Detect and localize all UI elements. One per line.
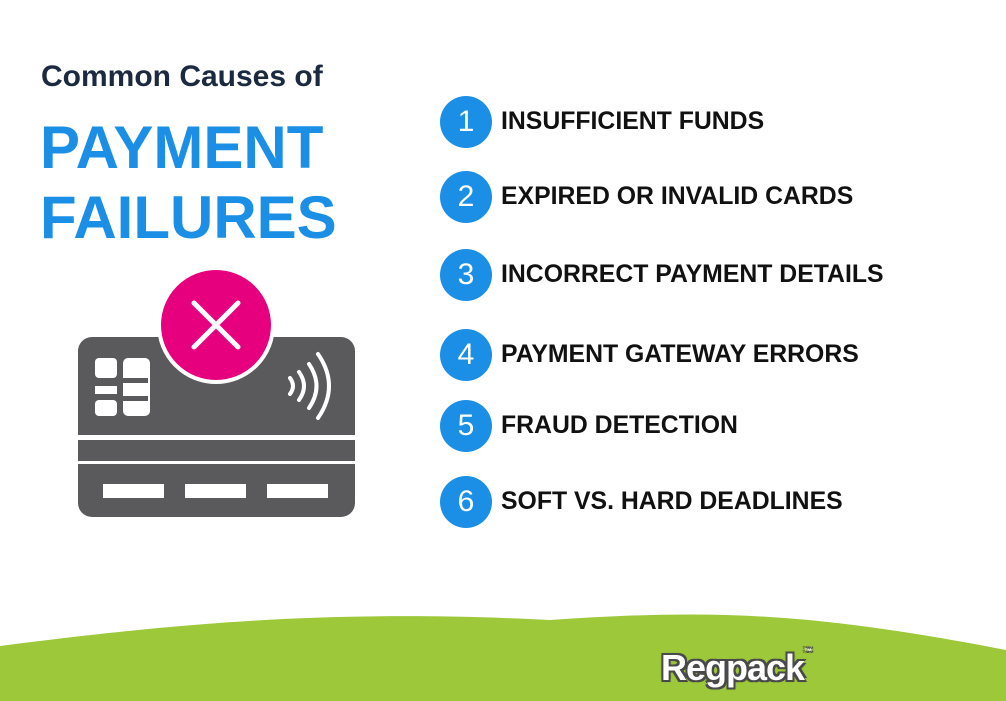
icon: declined credit card [78, 270, 355, 517]
title: payment failures: PAYMENT [40, 114, 323, 181]
item 3 [440, 249, 884, 301]
footer green wave [0, 614, 1006, 701]
item 6: SOFT VS. HARD DEADLINES [501, 488, 843, 515]
item 4: PAYMENT GATEWAY ERRORS [501, 341, 859, 368]
item 1: INSUFFICIENT FUNDS [501, 108, 764, 135]
item 4 [440, 329, 859, 381]
item 4: 4 [458, 338, 474, 371]
item 6 [440, 476, 843, 528]
item 5: FRAUD DETECTION [501, 412, 738, 439]
item 1: 1 [458, 105, 474, 138]
list: causes [440, 96, 884, 528]
item 3: INCORRECT PAYMENT DETAILS [501, 261, 884, 288]
item 5: 5 [458, 409, 474, 442]
title: common causes of: Common Causes of [41, 60, 323, 93]
item 2: 2 [458, 180, 474, 213]
title: payment failures [40, 114, 337, 251]
item 2 [440, 171, 853, 223]
title: payment failures: FAILURES [40, 184, 337, 251]
item 5 [440, 400, 738, 452]
item 1 [440, 96, 764, 148]
logo: regpack: Regpack™ [661, 647, 811, 688]
item 2: EXPIRED OR INVALID CARDS [501, 183, 853, 210]
item 6: 6 [458, 485, 474, 518]
item 3: 3 [458, 258, 474, 291]
